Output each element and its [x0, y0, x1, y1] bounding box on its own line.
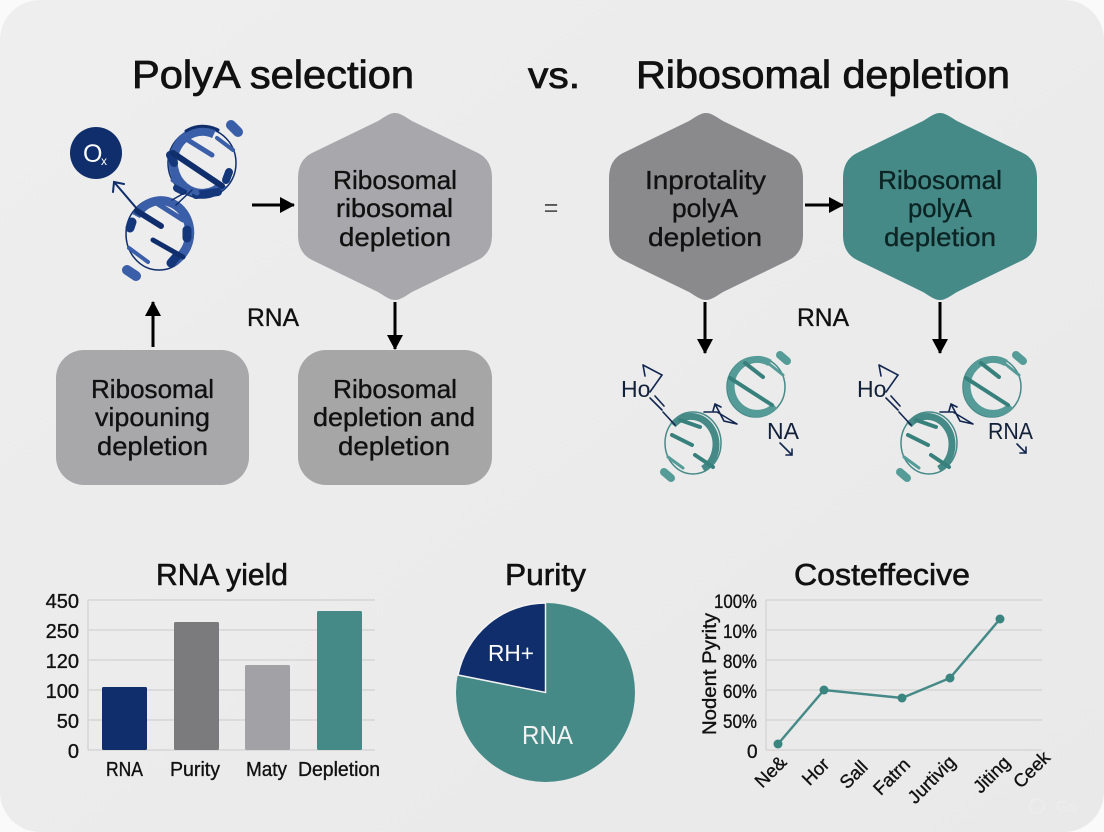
line chart: Costeffecive: Jurtivig: [903, 751, 960, 808]
icon: oxidant circle: O: [83, 140, 102, 168]
pie chart: Purity: RH+: [488, 640, 534, 666]
arrow: up from box to helix: [152, 302, 154, 347]
heading: Purity: Purity: [505, 557, 587, 592]
icon: navy DNA helix: [113, 125, 238, 276]
panel: teal hexagon ribosomal polyA depletion: depletion: [884, 222, 996, 252]
label: RNA right: RNA: [797, 304, 849, 332]
watermark: [1030, 799, 1076, 816]
arrow: down from hexagon to box: [394, 302, 396, 349]
panel: teal hexagon ribosomal polyA depletion: polyA: [908, 193, 973, 223]
icon: teal DNA helix right with labels: [857, 355, 1034, 478]
icon: teal DNA helix left with labels: NA: [767, 418, 800, 444]
panel: box ribosomal vipouning depletion: depletion: [97, 431, 208, 461]
label: equals sign: =: [544, 194, 558, 222]
line chart: Costeffecive: Fatrn: [869, 754, 914, 799]
bar chart: RNA yield: 50: [57, 711, 79, 733]
line chart: Costeffecive: 100%: [714, 592, 757, 613]
icon: oxidant circle: x: [101, 154, 107, 168]
line chart: Costeffecive: 0: [747, 742, 758, 763]
arrow: down from grey hexagon: [704, 302, 706, 353]
panel: box ribosomal vipouning depletion: [56, 350, 249, 485]
line chart: Costeffecive: 50%: [723, 712, 757, 733]
line chart: Costeffecive: Nodent Pyrity: [700, 612, 721, 735]
panel: hexagon ribosomal depletion: depletion: [339, 222, 451, 252]
panel: box ribosomal depletion and depletion: Ribosomal: [333, 374, 457, 404]
watermark: Gs: [1056, 799, 1076, 816]
bar chart: RNA yield: 450: [46, 591, 79, 613]
title: vs.: vs.: [528, 55, 580, 96]
pie chart: Purity: RNA: [522, 720, 574, 750]
icon: teal DNA helix left with labels: Ho: [621, 376, 650, 402]
panel: box ribosomal depletion and depletion: depletion and: [313, 402, 475, 432]
line chart: Costeffecive: Ceek: [1009, 746, 1055, 792]
heading: Costeffecive: Costeffecive: [794, 557, 970, 592]
bar chart: RNA yield: Maty: [246, 759, 287, 781]
line chart: Costeffecive: Sall: [835, 756, 872, 793]
icon: teal DNA helix right with labels: RNA: [988, 418, 1034, 444]
panel: box ribosomal vipouning depletion: vipouning: [95, 402, 210, 432]
line chart: Costeffecive: 60%: [723, 682, 757, 703]
panel: hexagon inprotality polyA depletion: Inprotality: [645, 165, 766, 195]
panel: hexagon ribosomal depletion: Ribosomal: [333, 165, 457, 195]
bar chart: RNA yield: 0: [68, 741, 79, 763]
line chart: Costeffecive: [700, 592, 1055, 808]
heading: RNA yield: RNA yield: [156, 557, 288, 592]
icon: teal DNA helix right with labels: Ho: [857, 376, 886, 402]
title: Ribosomal depletion: Ribosomal depletion: [636, 54, 1010, 97]
arrow: grey hexagon to teal hexagon: [805, 204, 843, 206]
bar chart: RNA yield: RNA: [106, 759, 144, 781]
line chart: Costeffecive: Hor: [797, 753, 833, 789]
icon: teal DNA helix left with labels: [621, 355, 800, 478]
panel: hexagon inprotality polyA depletion: depletion: [648, 222, 762, 252]
bar chart: RNA yield: Purity: [170, 759, 220, 781]
panel: teal hexagon ribosomal polyA depletion: [843, 113, 1037, 300]
line chart: Costeffecive: Jiting: [969, 752, 1014, 797]
panel: box ribosomal depletion and depletion: [298, 350, 492, 485]
panel: hexagon ribosomal depletion: ribosomal: [336, 193, 453, 223]
line chart: Costeffecive: 80%: [723, 652, 757, 673]
bar chart: RNA yield: [46, 591, 380, 781]
panel: hexagon ribosomal depletion: [298, 113, 492, 300]
label: RNA left: RNA: [247, 304, 299, 332]
bar chart: RNA yield: 250: [46, 621, 79, 643]
arrow: down from teal hexagon: [938, 302, 942, 353]
bar chart: RNA yield: Depletion: [298, 759, 380, 781]
panel: box ribosomal vipouning depletion: Ribosomal: [91, 374, 214, 404]
bar chart: RNA yield: 120: [46, 651, 79, 673]
bar chart: RNA yield: 100: [46, 681, 79, 703]
arrow: helix to hexagon: [252, 204, 294, 206]
title: PolyA selection: PolyA selection: [132, 54, 414, 97]
panel: hexagon inprotality polyA depletion: polyA: [672, 193, 739, 223]
panel: box ribosomal depletion and depletion: depletion: [338, 431, 450, 461]
panel: hexagon inprotality polyA depletion: [609, 113, 803, 300]
panel: teal hexagon ribosomal polyA depletion: Ribosomal: [878, 165, 1002, 195]
icon: oxidant circle: [70, 127, 122, 179]
line chart: Costeffecive: Ne&: [750, 751, 791, 792]
pie chart: Purity: [456, 603, 635, 782]
line chart: Costeffecive: 10%: [723, 622, 757, 643]
